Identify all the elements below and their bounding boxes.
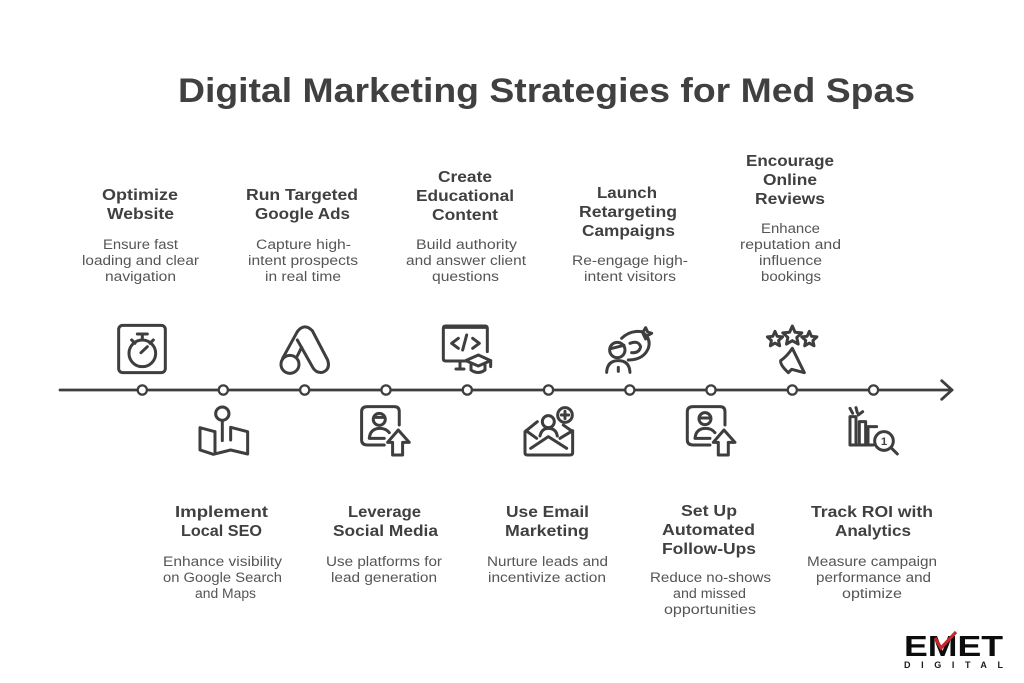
description: optimize website: navigation	[105, 269, 176, 284]
heading: automated follow-ups: Follow-Ups	[662, 541, 756, 558]
description: automated follow-ups: Reduce no-shows	[650, 570, 771, 585]
heading: automated follow-ups	[662, 503, 756, 558]
heading: email marketing: Use Email	[506, 504, 589, 521]
description: online reviews: influence	[759, 253, 822, 268]
description: optimize website: loading and clear	[82, 253, 200, 268]
heading: online reviews: Encourage	[746, 153, 834, 170]
step: use email marketing	[487, 408, 608, 585]
step: optimize website	[82, 187, 200, 373]
description: local seo: on Google Search	[163, 570, 282, 585]
description: google ads: in real time	[265, 269, 341, 284]
heading: social media: Social Media	[333, 523, 438, 540]
heading: local seo: Local SEO	[181, 523, 262, 540]
icon: map with pin	[200, 407, 248, 454]
step: leverage social media	[326, 407, 443, 585]
description: educational content: Build authority	[416, 237, 517, 252]
heading: roi analytics: Analytics	[835, 523, 911, 540]
description: social media	[326, 554, 443, 585]
description: automated follow-ups	[650, 570, 771, 617]
step: run targeted google ads	[246, 187, 358, 373]
heading: educational content: Educational	[416, 188, 514, 205]
description: social media: Use platforms for	[326, 554, 443, 569]
icon: bar chart with magnifier: 1	[881, 436, 887, 448]
heading: automated follow-ups: Automated	[662, 522, 755, 539]
description: roi analytics	[807, 554, 937, 601]
heading: email marketing	[505, 504, 589, 540]
description: social media: lead generation	[331, 570, 437, 585]
heading: google ads: Google Ads	[255, 206, 350, 223]
heading: email marketing: Marketing	[505, 523, 589, 540]
icon: envelope with person	[525, 408, 573, 455]
description: educational content: and answer client	[406, 253, 526, 268]
description: online reviews	[740, 221, 841, 284]
description: online reviews: reputation and	[740, 237, 841, 252]
description: retargeting campaigns: Re-engage high-	[572, 253, 688, 268]
heading: retargeting campaigns	[579, 185, 677, 240]
timeline arrow	[60, 381, 952, 399]
heading: optimize website: Website	[107, 206, 174, 223]
description: google ads	[248, 237, 358, 284]
heading: roi analytics: Track ROI with	[811, 504, 933, 521]
icon: bar chart with magnifier	[850, 408, 897, 454]
icon: profile with up arrow	[687, 407, 735, 455]
step: encourage online reviews	[740, 153, 841, 373]
logo: emet digital: DIGITAL	[904, 660, 1004, 670]
heading: educational content: Create	[438, 169, 492, 186]
description: educational content	[406, 237, 526, 284]
icon: stars and cursor	[767, 326, 817, 373]
heading: local seo: Implement	[175, 504, 269, 521]
heading: online reviews: Reviews	[755, 191, 825, 208]
step: launch retargeting campaigns	[572, 185, 688, 372]
description: retargeting campaigns: intent visitors	[584, 269, 676, 284]
heading: retargeting campaigns: Launch	[597, 185, 657, 202]
description: email marketing: Nurture leads and	[487, 554, 608, 569]
description: retargeting campaigns	[572, 253, 688, 284]
description: online reviews: Enhance	[761, 221, 820, 236]
description: local seo	[163, 554, 282, 601]
description: optimize website: Ensure fast	[103, 237, 178, 252]
description: roi analytics: Measure campaign	[807, 554, 937, 569]
heading: social media	[333, 504, 438, 540]
heading: retargeting campaigns: Retargeting	[579, 204, 677, 221]
heading: optimize website: Optimize	[102, 187, 178, 204]
heading: educational content	[416, 169, 514, 224]
step: track roi with analytics	[807, 408, 937, 601]
icon: google ads logo	[281, 327, 328, 373]
step: create educational content	[406, 169, 526, 372]
icon: profile with up arrow	[362, 407, 409, 455]
description: educational content: questions	[432, 269, 499, 284]
logo: emet digital	[904, 631, 1004, 670]
heading: online reviews	[746, 153, 834, 208]
description: google ads: Capture high-	[256, 237, 351, 252]
heading: educational content: Content	[432, 207, 499, 224]
description: online reviews: bookings	[761, 269, 821, 284]
description: email marketing: incentivize action	[488, 570, 606, 585]
heading: local seo	[175, 504, 269, 540]
heading: google ads: Run Targeted	[246, 187, 358, 204]
heading: retargeting campaigns: Campaigns	[582, 223, 675, 240]
heading: optimize website	[102, 187, 178, 223]
heading: online reviews: Online	[763, 172, 817, 189]
icon: person with target	[607, 328, 652, 372]
description: automated follow-ups: and missed	[673, 586, 746, 601]
title: Digital Marketing Strategies for Med Spas	[178, 72, 915, 110]
description: google ads: intent prospects	[248, 253, 358, 268]
step: set up automated follow-ups	[650, 407, 771, 617]
description: local seo: and Maps	[195, 586, 256, 601]
description: automated follow-ups: opportunities	[664, 602, 756, 617]
heading: automated follow-ups: Set Up	[681, 503, 737, 520]
description: optimize website	[82, 237, 200, 284]
heading: roi analytics	[811, 504, 933, 540]
heading: social media: Leverage	[348, 504, 421, 521]
icon: stopwatch	[119, 325, 165, 373]
logo: emet digital: EMET	[904, 631, 1003, 663]
step: implement local seo	[163, 407, 282, 601]
description: email marketing	[487, 554, 608, 585]
heading: google ads	[246, 187, 358, 223]
icon: code monitor with graduation cap	[443, 326, 491, 372]
description: roi analytics: optimize	[842, 586, 902, 601]
description: roi analytics: performance and	[816, 570, 931, 585]
description: local seo: Enhance visibility	[163, 554, 282, 569]
